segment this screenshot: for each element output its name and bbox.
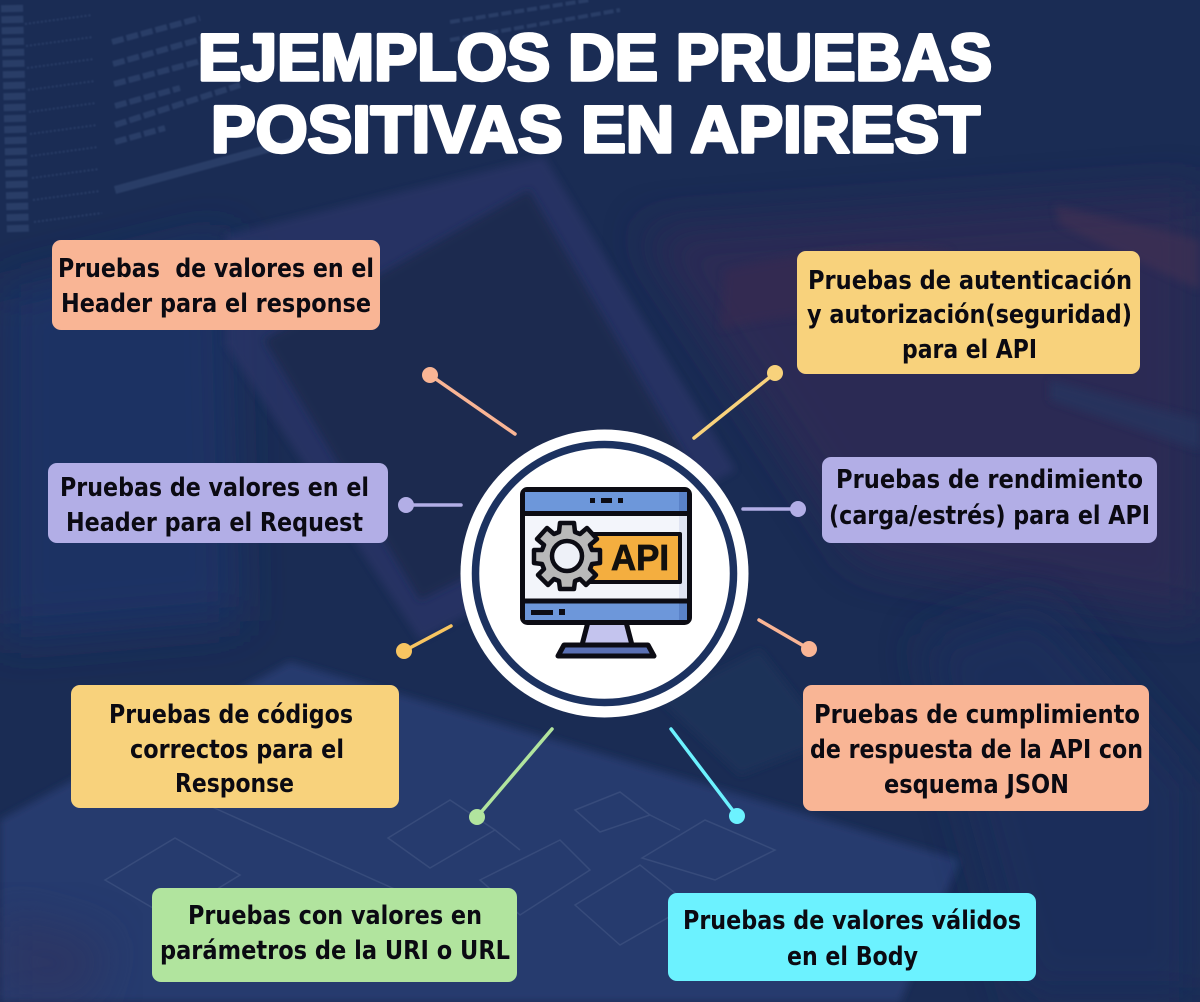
connector: bottom left green [469, 729, 552, 825]
title: EJEMPLOS DE PRUEBAS [198, 20, 992, 94]
panel: authentication and authorization: para el API [902, 335, 1037, 365]
panel: valid body values [668, 893, 1036, 981]
panel: header values for response: Pruebas de valores en el [58, 254, 374, 284]
connector: lower left yellow [396, 626, 451, 659]
icon: API monitor [522, 490, 690, 656]
panel: valid body values: en el Body [787, 942, 918, 972]
connector: left purple [398, 497, 461, 513]
panel: JSON schema compliance: esquema JSON [884, 770, 1069, 800]
panel: valid body values: Pruebas de valores válidos [683, 906, 1021, 936]
panel: authentication and authorization [797, 251, 1140, 374]
panel: header values for response: Header para el response [61, 289, 371, 319]
panel: correct response codes: Pruebas de códigos [109, 700, 353, 730]
icon: gear [534, 523, 600, 589]
title: POSITIVAS EN APIREST [211, 92, 980, 166]
panel: URI or URL parameters [152, 888, 517, 982]
connector: lower right peach [759, 620, 817, 657]
panel: performance [822, 457, 1157, 543]
panel: URI or URL parameters: Pruebas con valores en [188, 901, 482, 931]
panel: correct response codes [71, 685, 399, 808]
connector: top right yellow [694, 365, 783, 438]
panel: performance: (carga/estrés) para el API [829, 501, 1150, 531]
panel: authentication and authorization: Pruebas de autenticación [808, 266, 1132, 296]
panel: header values for request [48, 463, 388, 543]
panel: header values for request: Pruebas de valores en el [60, 473, 369, 503]
panel: header values for response [52, 240, 380, 330]
panel: authentication and authorization: y autorización(seguridad) [807, 300, 1132, 330]
panel: URI or URL parameters: parámetros de la URI o URL [160, 936, 510, 966]
panel: JSON schema compliance: Pruebas de cumplimiento [814, 700, 1140, 730]
panel: correct response codes: correctos para el [130, 735, 344, 765]
panel: JSON schema compliance: de respuesta de la API con [810, 735, 1143, 765]
panel: JSON schema compliance [803, 685, 1149, 811]
title [198, 20, 992, 166]
connector: bottom right cyan [671, 729, 745, 824]
icon: API monitor: API [611, 537, 669, 578]
panel: performance: Pruebas de rendimiento [836, 465, 1143, 495]
connector: right purple [743, 501, 806, 517]
central badge [460, 430, 748, 718]
panel: correct response codes: Response [175, 769, 294, 799]
panel: header values for request: Header para el Request [66, 508, 363, 538]
connector: top left peach [422, 367, 515, 434]
